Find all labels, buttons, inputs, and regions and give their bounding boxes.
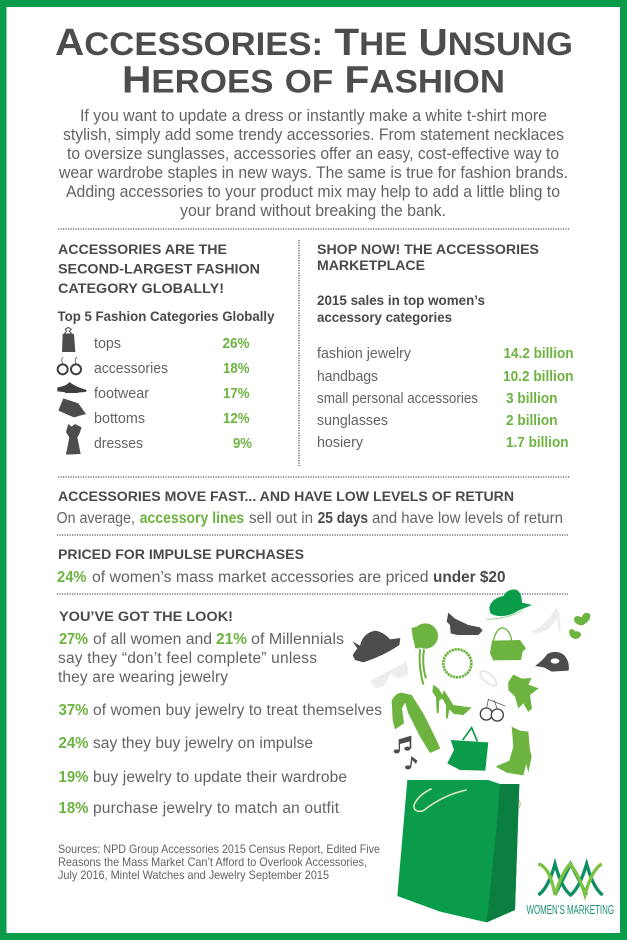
category rows: dresses (94, 436, 143, 452)
text: under $20: 24% (57, 569, 87, 586)
category rows: 12% (223, 411, 250, 427)
stat: on impulse: say they buy jewelry on impulse (93, 735, 313, 752)
icon: tank top (62, 327, 75, 352)
text: under $20: under $20 (433, 569, 506, 586)
sales rows: fashion jewelry (317, 346, 412, 362)
category rows: 18% (223, 361, 250, 377)
shopping bag (397, 780, 520, 922)
category rows: 26% (222, 336, 250, 352)
sales rows: 2 billion (506, 413, 558, 429)
heading: shop now: MARKETPLACE (317, 258, 425, 274)
icon: dark green handbag (447, 728, 488, 771)
intro paragraph: wear wardrobe staples in new ways. The same is true for fashion brands. (58, 164, 568, 182)
stat: don't feel complete (58, 631, 344, 686)
icon: green high heels (432, 685, 472, 719)
stat: on impulse: 24% (58, 735, 89, 752)
sales rows: 1.7 billion (506, 435, 568, 451)
title (55, 22, 573, 102)
stat: don't feel complete: of Millennials (251, 631, 344, 648)
bag rope handle (414, 789, 467, 811)
sales rows: 3 billion (506, 391, 558, 407)
sales rows: 14.2 billion (504, 346, 574, 362)
stat: don't feel complete: they are wearing jewelry (58, 669, 228, 686)
icon: masquerade mask (535, 652, 569, 672)
category rows: accessories (94, 361, 168, 377)
text: sell out in 25 days: sell out in (249, 510, 313, 527)
subheading: 2015 sales: 2015 sales in top women’s (317, 292, 485, 308)
stat: update wardrobe: buy jewelry to update their wardrobe (93, 769, 347, 786)
heading: got the look: YOU’VE GOT THE LOOK! (59, 609, 233, 625)
icon: white high heel (531, 607, 561, 633)
intro paragraph: to oversize sunglasses, accessories offer an easy, cost-effective way to (67, 145, 559, 163)
icon: bead necklace (443, 649, 471, 677)
icon: music notes (394, 736, 417, 769)
icon: sunglasses (370, 662, 409, 689)
icon: hearts (569, 613, 590, 639)
sources: July 2016, Mintel Watches and Jewelry September 2015 (58, 869, 329, 882)
category rows: 17% (223, 386, 250, 402)
category rows: footwear (94, 386, 149, 402)
category rows: bottoms (94, 411, 145, 427)
icon: scarf (392, 693, 440, 753)
heading: second-largest category: SECOND-LARGEST FASHION (58, 262, 260, 278)
subheading: 2015 sales: accessory categories (317, 309, 452, 325)
sources: Reasons the Mass Market Can’t Afford to Overlook Accessories, (58, 856, 367, 869)
stat: treat themselves: 37% (58, 702, 89, 719)
icon: green hat (486, 589, 532, 619)
stat: don't feel complete: say they “don’t feel complete” unless (58, 650, 317, 667)
stat: match an outfit: 18% (58, 800, 89, 817)
intro paragraph: If you want to update a dress or instantly make a white t-shirt more (80, 107, 547, 125)
panel: top 5 fashion categories (57, 242, 275, 455)
title: HEROES OF FASHION (122, 60, 505, 102)
category rows: 9% (233, 436, 252, 452)
panel: accessories move fast (56, 489, 563, 527)
sales rows: hosiery (317, 435, 364, 451)
category rows (94, 336, 252, 452)
subheading: top 5 categories: Top 5 Fashion Categories Globally (58, 308, 275, 324)
text: sell out in 25 days: accessory lines (140, 510, 244, 527)
intro paragraph: your brand without breaking the bank. (180, 202, 446, 220)
heading: second-largest category: ACCESSORIES ARE THE (58, 242, 227, 258)
sources: Sources: NPD Group Accessories 2015 Census Report, Edited Five (58, 843, 380, 856)
stat: don't feel complete: 21% (216, 631, 247, 648)
icon: bracelet (478, 668, 499, 688)
heading: shop now (317, 242, 539, 274)
intro paragraph: stylish, simply add some trendy accessories. From statement necklaces (63, 126, 564, 144)
icon: dress (66, 424, 82, 455)
sales rows: small personal accessories (317, 391, 478, 407)
sources (58, 843, 380, 882)
text: sell out in 25 days (56, 510, 563, 527)
icon: bonnet (411, 623, 438, 685)
illustration: accessories falling into bag (352, 589, 614, 922)
icon: hoop earrings (480, 699, 505, 721)
text: sell out in 25 days: 25 days (318, 510, 368, 527)
panel: priced for impulse (57, 547, 506, 586)
icon: sandal (57, 382, 87, 393)
icon: dark hat (352, 631, 400, 662)
sales rows (317, 346, 574, 451)
bag side panel (487, 784, 519, 922)
icon: boot (496, 727, 532, 775)
icon: skirt (58, 398, 86, 417)
panel: accessories marketplace (317, 242, 574, 451)
category rows: tops (94, 336, 121, 352)
stat: update wardrobe: 19% (58, 769, 89, 786)
logo: women's marketing (526, 864, 614, 917)
heading: move fast: ACCESSORIES MOVE FAST... AND HAVE LOW LEVELS OF RETURN (58, 489, 514, 505)
icon: wedge shoe (447, 613, 483, 635)
heading: impulse purchases: PRICED FOR IMPULSE PURCHASES (58, 547, 304, 563)
icon: handbag (490, 628, 526, 660)
panel: you've got the look (58, 609, 382, 882)
sales rows: handbags (317, 369, 378, 385)
stat: match an outfit: purchase jewelry to match an outfit (93, 800, 340, 817)
stat: don't feel complete: 27% (59, 631, 88, 648)
sales rows: sunglasses (317, 413, 388, 429)
heading: second-largest category (58, 242, 260, 297)
sales rows: 10.2 billion (503, 369, 574, 385)
text: under $20: of women’s mass market accessories are priced (92, 569, 429, 586)
intro paragraph (58, 107, 568, 220)
text: sell out in 25 days: On average, (56, 510, 135, 527)
subheading: 2015 sales (317, 292, 485, 325)
icon: earrings (58, 357, 81, 374)
heading: second-largest category: CATEGORY GLOBALLY! (58, 281, 224, 297)
stat: don't feel complete: of all women and (93, 631, 212, 648)
icon: gloves (508, 675, 539, 712)
title: ACCESSORIES: THE UNSUNG (55, 22, 573, 64)
heading: shop now: SHOP NOW! THE ACCESSORIES (317, 242, 539, 258)
stat: treat themselves: of women buy jewelry to treat themselves (93, 702, 382, 719)
accessory icons (352, 589, 590, 775)
intro paragraph: Adding accessories to your product mix may help to add a little bling to (66, 183, 560, 201)
text: sell out in 25 days: and have low levels of return (372, 510, 563, 527)
